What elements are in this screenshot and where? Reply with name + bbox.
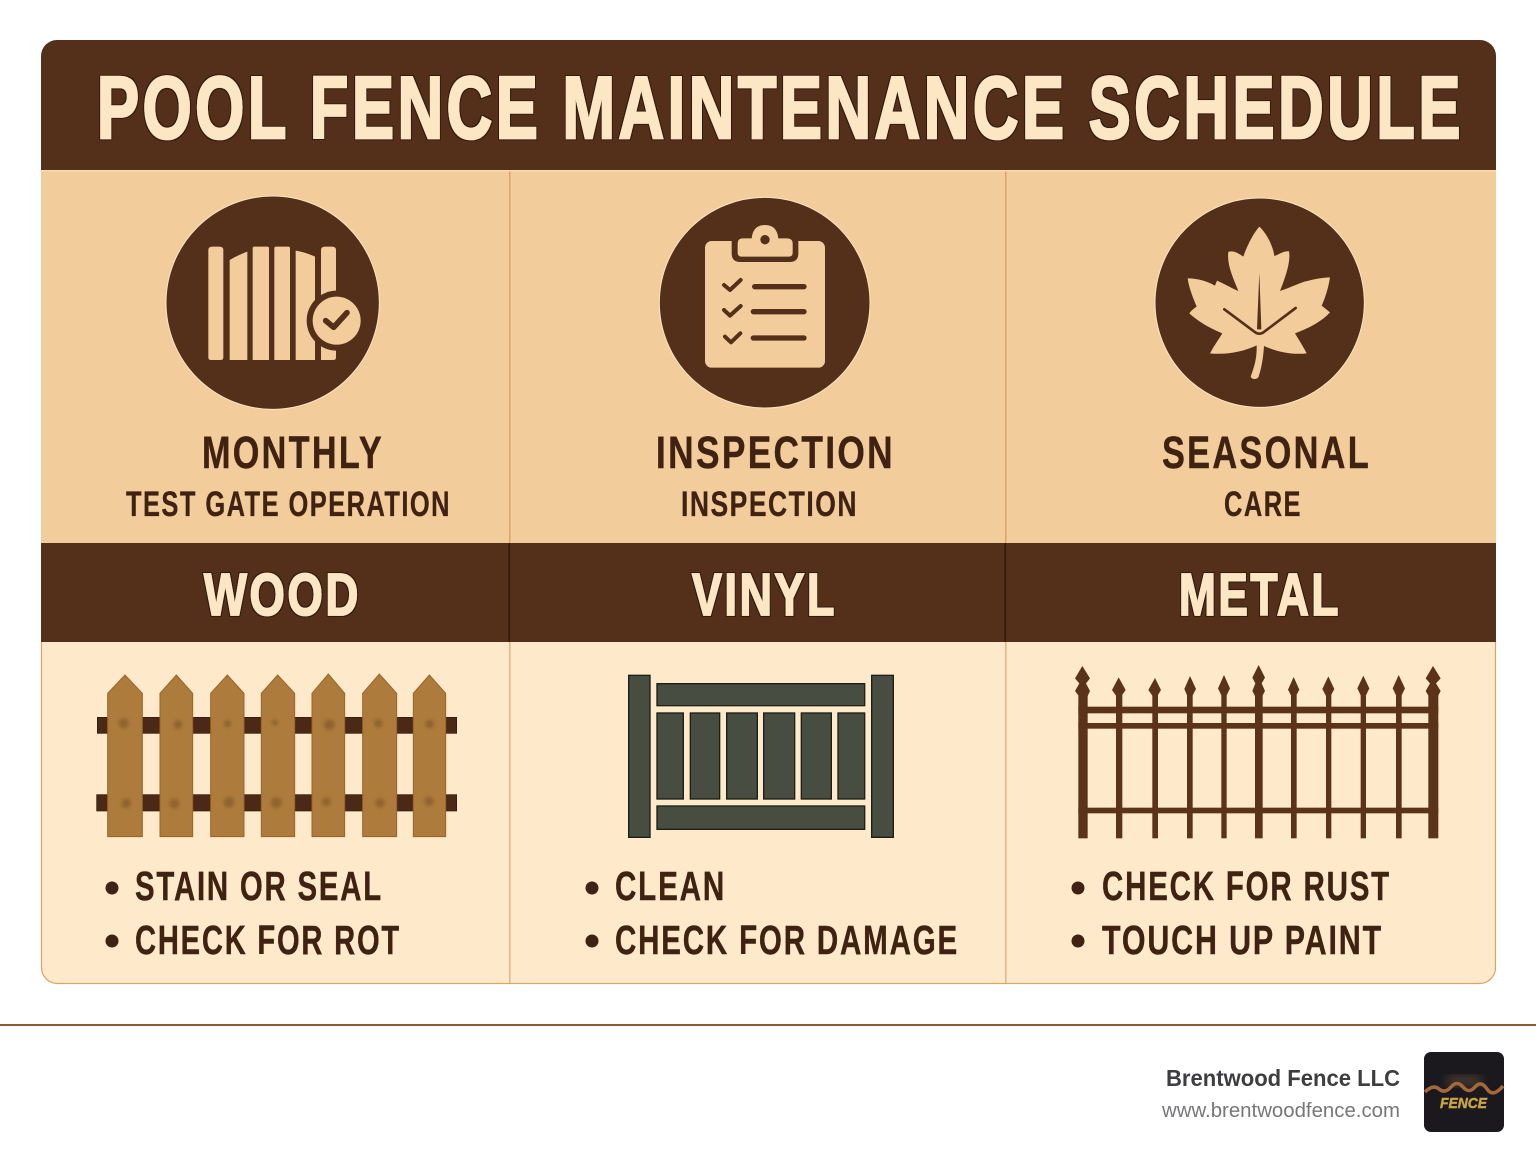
illustration: vinyl fence panel (629, 675, 893, 837)
logo: brentwood fence: FENCE (1440, 1095, 1488, 1112)
list: wood tasks: STAIN OR SEAL (135, 863, 383, 909)
panel: maintenance schedule card (41, 40, 1496, 984)
list: metal tasks: TOUCH UP PAINT (1102, 917, 1383, 963)
list: wood tasks: CHECK FOR ROT (135, 917, 401, 963)
list: vinyl tasks: CLEAN (615, 863, 726, 909)
list: wood tasks (106, 863, 401, 963)
list: metal tasks: CHECK FOR RUST (1102, 863, 1391, 909)
heading: seasonal: SEASONAL (1162, 427, 1371, 478)
heading: inspection: INSPECTION (656, 427, 895, 478)
footer divider (0, 1024, 1536, 1026)
heading: monthly: MONTHLY (202, 427, 384, 478)
text: inspection: INSPECTION (681, 485, 858, 524)
footer: website: www.brentwoodfence.com (1161, 1100, 1400, 1122)
footer: company name: Brentwood Fence LLC (1166, 1065, 1400, 1091)
list: vinyl tasks: CHECK FOR DAMAGE (615, 917, 959, 963)
illustration: wood picket fence (97, 674, 457, 837)
heading: vinyl: VINYL (692, 562, 837, 628)
text: test gate operation: TEST GATE OPERATION (126, 485, 451, 524)
text: care: CARE (1224, 485, 1302, 524)
heading: wood: WOOD (204, 562, 361, 628)
list: vinyl tasks (586, 863, 959, 963)
logo: brentwood fence (1424, 1052, 1504, 1132)
icon: maple leaf (1155, 198, 1364, 407)
icon: fence gate with check (166, 196, 379, 409)
heading: metal: METAL (1179, 562, 1341, 628)
icon: clipboard checklist (659, 197, 870, 408)
illustration: metal spear fence (1075, 665, 1441, 838)
list: metal tasks (1072, 863, 1391, 963)
